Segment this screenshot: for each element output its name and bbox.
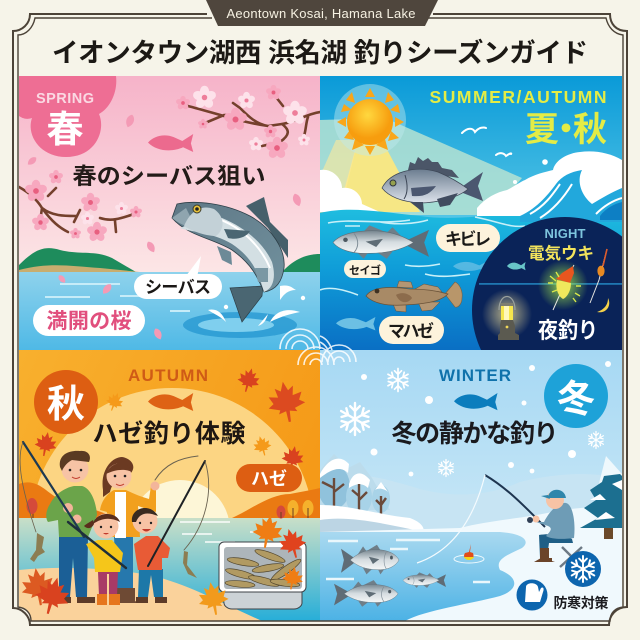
snow ground: right <box>320 504 622 621</box>
badge label: SPRING <box>36 91 94 107</box>
seabass jumping fish <box>172 197 288 322</box>
heading: spring: 春のシーバス狙い <box>72 164 266 189</box>
snowy pine tree <box>580 474 622 539</box>
badge: autumn: 秋 <box>47 384 85 426</box>
autumn leaves <box>33 366 308 472</box>
badge kanji: 春 <box>46 109 84 150</box>
top banner <box>206 0 438 26</box>
sandy shore <box>19 568 262 621</box>
cherry branch: left <box>19 170 143 243</box>
bait tray <box>219 542 306 609</box>
seagulls <box>462 127 511 156</box>
caption: cold protection: 防寒対策 <box>554 595 608 611</box>
panel: winter <box>318 350 622 621</box>
cherry branch: top right <box>175 85 320 160</box>
callout: seabass <box>134 274 222 299</box>
icon: mitten <box>516 580 548 610</box>
son <box>132 508 170 603</box>
frozen lake <box>320 532 526 621</box>
seigaiha wave ornaments <box>280 329 356 365</box>
water highlights <box>320 217 525 295</box>
daughter <box>84 514 123 605</box>
main title: イオンタウン湖西 浜名湖 釣りシーズンガイド <box>52 38 588 68</box>
heading: autumn: ハゼ釣り体験 <box>92 419 246 448</box>
snowflakes <box>341 361 611 476</box>
badge: winter <box>544 364 608 428</box>
snow bank: left <box>320 505 424 532</box>
snowy trees: left <box>318 459 390 516</box>
water <box>320 205 622 350</box>
fish silhouette: winter <box>454 393 498 410</box>
badge: spring <box>19 76 116 157</box>
small night fish <box>507 262 526 270</box>
season kanji: summer/autumn: 夏・秋 <box>525 111 607 149</box>
foreground leaves <box>19 513 309 618</box>
fishing rods <box>20 442 209 568</box>
night label: NIGHT <box>544 226 586 241</box>
electric float <box>538 260 588 310</box>
callout: kibire <box>436 224 500 252</box>
distant hills <box>19 248 320 274</box>
water ripple <box>183 312 297 338</box>
fish silhouette: spring <box>148 134 193 152</box>
fish: goby <box>366 281 462 312</box>
float <box>454 544 484 563</box>
fish: black seabream <box>382 157 483 213</box>
night inset <box>472 217 622 350</box>
slender float <box>590 249 607 303</box>
hooked goby: right <box>183 551 197 578</box>
season label: autumn: AUTUMN <box>128 366 208 385</box>
night fishing label: 夜釣り <box>538 318 598 343</box>
top banner: Aeontown Kosai, Hamana Lake <box>226 6 416 21</box>
callout: seabass: シーバス <box>145 278 211 297</box>
panel: autumn <box>19 350 320 640</box>
lantern <box>482 289 532 340</box>
badge: autumn <box>34 370 98 434</box>
ice highlights <box>326 540 490 582</box>
sunset glow <box>30 388 314 640</box>
lake water <box>19 272 320 350</box>
callout: seigo: セイゴ <box>349 263 381 277</box>
callout: haze <box>236 464 302 492</box>
callout: kibire: キビレ <box>445 229 491 249</box>
fish: lower <box>334 580 398 607</box>
callout: mahaze <box>379 316 444 344</box>
falling petals <box>26 114 303 341</box>
panel: spring <box>19 76 320 350</box>
heading: winter: 冬の静かな釣り <box>392 420 558 448</box>
crescent moon <box>597 298 609 312</box>
sunlight beams <box>320 118 522 215</box>
icon: snowflake <box>565 551 601 587</box>
fish: seigo <box>333 225 429 259</box>
callout: full bloom <box>33 305 145 336</box>
label arrow: seabass <box>188 256 201 274</box>
water splash <box>208 285 305 326</box>
callout: haze: ハゼ <box>251 468 287 489</box>
small trees <box>26 498 314 518</box>
badge: winter: 冬 <box>557 379 595 421</box>
fish: small <box>403 572 446 588</box>
hills <box>19 482 320 518</box>
ocean wave <box>477 151 622 222</box>
setting sun <box>130 480 230 580</box>
season label: winter: WINTER <box>439 366 511 385</box>
father <box>46 451 97 603</box>
panel: summer/autumn <box>320 76 622 350</box>
sun <box>334 84 406 156</box>
clouds <box>320 170 380 212</box>
family of anglers <box>20 442 209 605</box>
fish silhouette: autumn <box>148 393 193 411</box>
fish: upper <box>341 545 399 574</box>
electric float label: 電気ウキ <box>528 244 594 263</box>
callout: mahaze: マハゼ <box>388 321 434 341</box>
angler on stool <box>417 475 582 567</box>
mother <box>100 457 160 603</box>
season label: summer/autumn: SUMMER/AUTUMN <box>430 87 606 107</box>
small fish <box>336 261 488 330</box>
callout: seigo <box>344 260 386 278</box>
lake <box>19 518 320 621</box>
callout: full bloom: 満開の桜 <box>46 310 132 333</box>
rod and line <box>417 475 545 563</box>
distant mountains <box>320 454 622 540</box>
hooked goby: left <box>30 533 45 562</box>
